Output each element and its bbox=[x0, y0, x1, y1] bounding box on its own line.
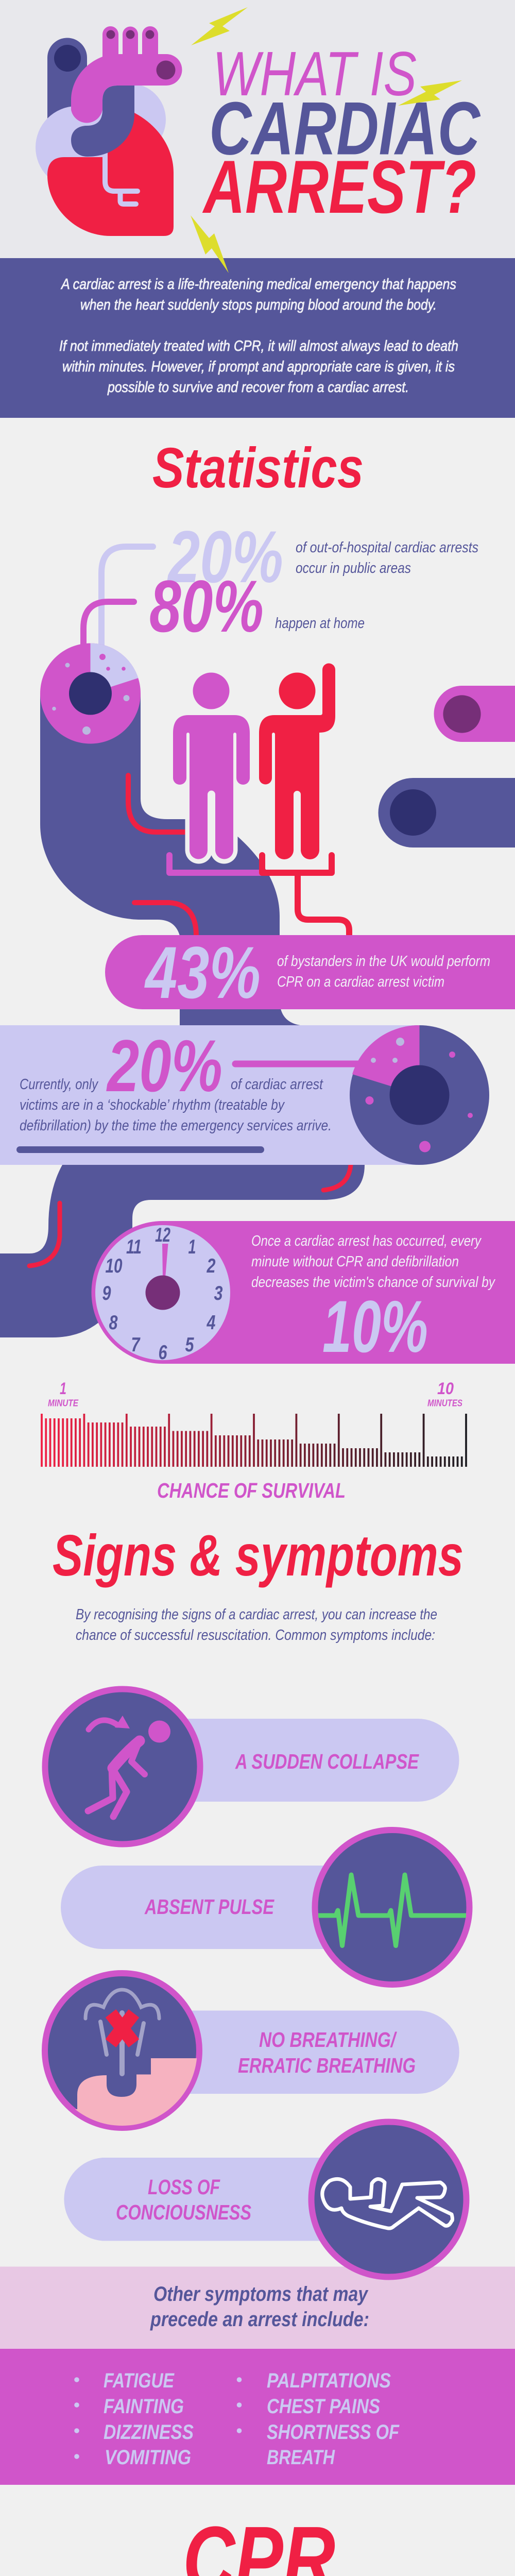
band: other symptoms list bbox=[0, 2349, 515, 2485]
chart: chance of survival ticks: 10 bbox=[437, 1379, 454, 1398]
panel: header bbox=[0, 0, 515, 418]
band: other symptoms list: SHORTNESS OF bbox=[267, 2421, 400, 2444]
icon: blocked airway bbox=[75, 1988, 197, 2126]
stat: 20 percent shockable band: Currently, only bbox=[20, 1076, 98, 1093]
intro text bbox=[59, 276, 458, 396]
connector: magenta to 80 percent bbox=[83, 602, 134, 645]
decorative pipe: lower purple tube bbox=[0, 1165, 365, 1337]
stat: 80 percent home: happen at home bbox=[275, 615, 365, 632]
decorative tube: purple bbox=[378, 778, 515, 848]
text: symptoms intro: By recognising the signs of a cardiac arrest, you can increase the bbox=[76, 1606, 437, 1623]
icon: people figures bbox=[169, 664, 349, 936]
icon: clock: 2 bbox=[207, 1255, 216, 1277]
stat: 20 percent shockable band: 20% bbox=[106, 1025, 222, 1107]
icon: lightning bolts bbox=[191, 7, 462, 273]
intro text: A cardiac arrest is a life-threatening medical emergency that happens bbox=[60, 276, 456, 293]
title: WHAT IS bbox=[213, 39, 417, 109]
symptom: loss of consciousness: LOSS OF bbox=[148, 2175, 220, 2199]
stat: 43 percent bar: 43% bbox=[144, 932, 261, 1014]
symptom: loss of consciousness bbox=[64, 2122, 466, 2277]
icon: clock: 1 bbox=[188, 1236, 196, 1258]
stat: 80 percent home: 80% bbox=[149, 566, 264, 648]
stat: 20 percent public: occur in public areas bbox=[296, 560, 411, 577]
decorative pipe: large purple tube bbox=[40, 693, 300, 1025]
icon: clock: 12 bbox=[155, 1224, 170, 1246]
icon: clock: 5 bbox=[185, 1334, 195, 1356]
icon: clock: 7 bbox=[131, 1334, 141, 1356]
band: other symptoms heading bbox=[0, 2267, 515, 2349]
symptom: no breathing: ERRATIC BREATHING bbox=[238, 2054, 416, 2077]
intro text: If not immediately treated with CPR, it will almost always lead to death bbox=[59, 338, 458, 354]
symptom: sudden collapse: A SUDDEN COLLAPSE bbox=[235, 1750, 419, 1773]
band: other symptoms list: FATIGUE bbox=[104, 2369, 175, 2392]
stat: 20 percent shockable band bbox=[0, 1025, 489, 1165]
text: symptoms intro bbox=[76, 1606, 437, 1643]
stat: 10 percent clock band bbox=[92, 1221, 515, 1368]
connector lines: red lower bbox=[29, 1165, 351, 1266]
intro text: within minutes. However, if prompt and appropriate care is given, it is bbox=[62, 359, 455, 375]
icon: clock: 8 bbox=[109, 1312, 118, 1334]
icon: collapsing figure bbox=[88, 1716, 170, 1817]
intro text: possible to survive and recover from a cardiac arrest. bbox=[107, 379, 409, 396]
intro text: when the heart suddenly stops pumping blood around the body. bbox=[80, 297, 437, 313]
title bbox=[202, 39, 481, 229]
stat: 20 percent shockable band: victims are in a ‘shockable’ rhythm (treatable by bbox=[20, 1097, 285, 1113]
stat: 80 percent home bbox=[149, 566, 365, 648]
chart: chance of survival ticks bbox=[41, 1379, 467, 1502]
chart: chance of survival ticks: CHANCE OF SURVIVAL bbox=[157, 1479, 346, 1502]
band: other symptoms list: FAINTING bbox=[104, 2395, 184, 2418]
band: other symptoms list: BREATH bbox=[267, 2446, 335, 2469]
band: other symptoms list: CHEST PAINS bbox=[267, 2395, 380, 2418]
icon: clock: 9 bbox=[102, 1282, 111, 1304]
symptom: absent pulse: ABSENT PULSE bbox=[144, 1895, 274, 1919]
icon: clock: 10 bbox=[105, 1255, 123, 1277]
chart: chance of survival ticks: MINUTES bbox=[427, 1398, 462, 1409]
stat: 10 percent clock band: minute without CPR and defibrillation bbox=[251, 1253, 459, 1270]
symptom: sudden collapse bbox=[45, 1689, 459, 1844]
stat: 20 percent shockable band: of cardiac arrest bbox=[231, 1076, 324, 1093]
symptom: absent pulse bbox=[61, 1830, 470, 1985]
stat: 10 percent clock band: 10% bbox=[322, 1286, 428, 1368]
stat: 43 percent bar: CPR on a cardiac arrest victim bbox=[277, 974, 444, 990]
text: symptoms intro: chance of successful resuscitation. Common symptoms include: bbox=[76, 1627, 435, 1643]
band: other symptoms heading: Other symptoms that may bbox=[153, 2283, 368, 2306]
connector lines: red bbox=[128, 775, 196, 936]
symptom: no breathing bbox=[45, 1973, 459, 2133]
band: other symptoms heading: precede an arrest include: bbox=[150, 2308, 369, 2331]
chart: donut shockable bbox=[350, 1025, 489, 1165]
icon: clock bbox=[92, 1221, 234, 1364]
panel: signs and symptoms bbox=[0, 1523, 515, 2485]
stat: 20 percent public: of out-of-hospital cardiac arrests bbox=[296, 539, 478, 556]
icon: heart bbox=[36, 26, 182, 236]
connector: lavender to 20 percent bbox=[101, 547, 153, 646]
icon: ecg line bbox=[318, 1875, 466, 1945]
icon: clock: 4 bbox=[207, 1312, 216, 1334]
symptom: no breathing: NO BREATHING/ bbox=[259, 2028, 397, 2052]
panel: statistics bbox=[0, 436, 515, 1502]
symptom: loss of consciousness: CONCIOUSNESS bbox=[116, 2200, 251, 2224]
chart: chance of survival ticks: MINUTE bbox=[48, 1398, 79, 1409]
icon: clock: 3 bbox=[214, 1282, 223, 1304]
stat: 20 percent public bbox=[167, 516, 478, 598]
heading: statistics: Statistics bbox=[152, 436, 364, 500]
band: other symptoms list: VOMITING bbox=[105, 2446, 191, 2469]
icon: clock: 6 bbox=[159, 1342, 167, 1364]
icon: figure lying down bbox=[322, 2179, 452, 2228]
stat: 43 percent bar bbox=[105, 932, 515, 1014]
chart: donut 20/80 bbox=[40, 643, 141, 744]
band: other symptoms list: PALPITATIONS bbox=[267, 2369, 391, 2392]
chart: chance of survival ticks: 1 bbox=[60, 1379, 66, 1398]
decorative tube: magenta bbox=[434, 686, 515, 742]
stat: 20 percent public: 20% bbox=[167, 516, 283, 598]
stat: 20 percent shockable band: defibrillation) by the time the emergency services arrive. bbox=[20, 1117, 332, 1134]
band: other symptoms list: DIZZINESS bbox=[104, 2421, 194, 2444]
icon: clock: 11 bbox=[126, 1236, 142, 1258]
